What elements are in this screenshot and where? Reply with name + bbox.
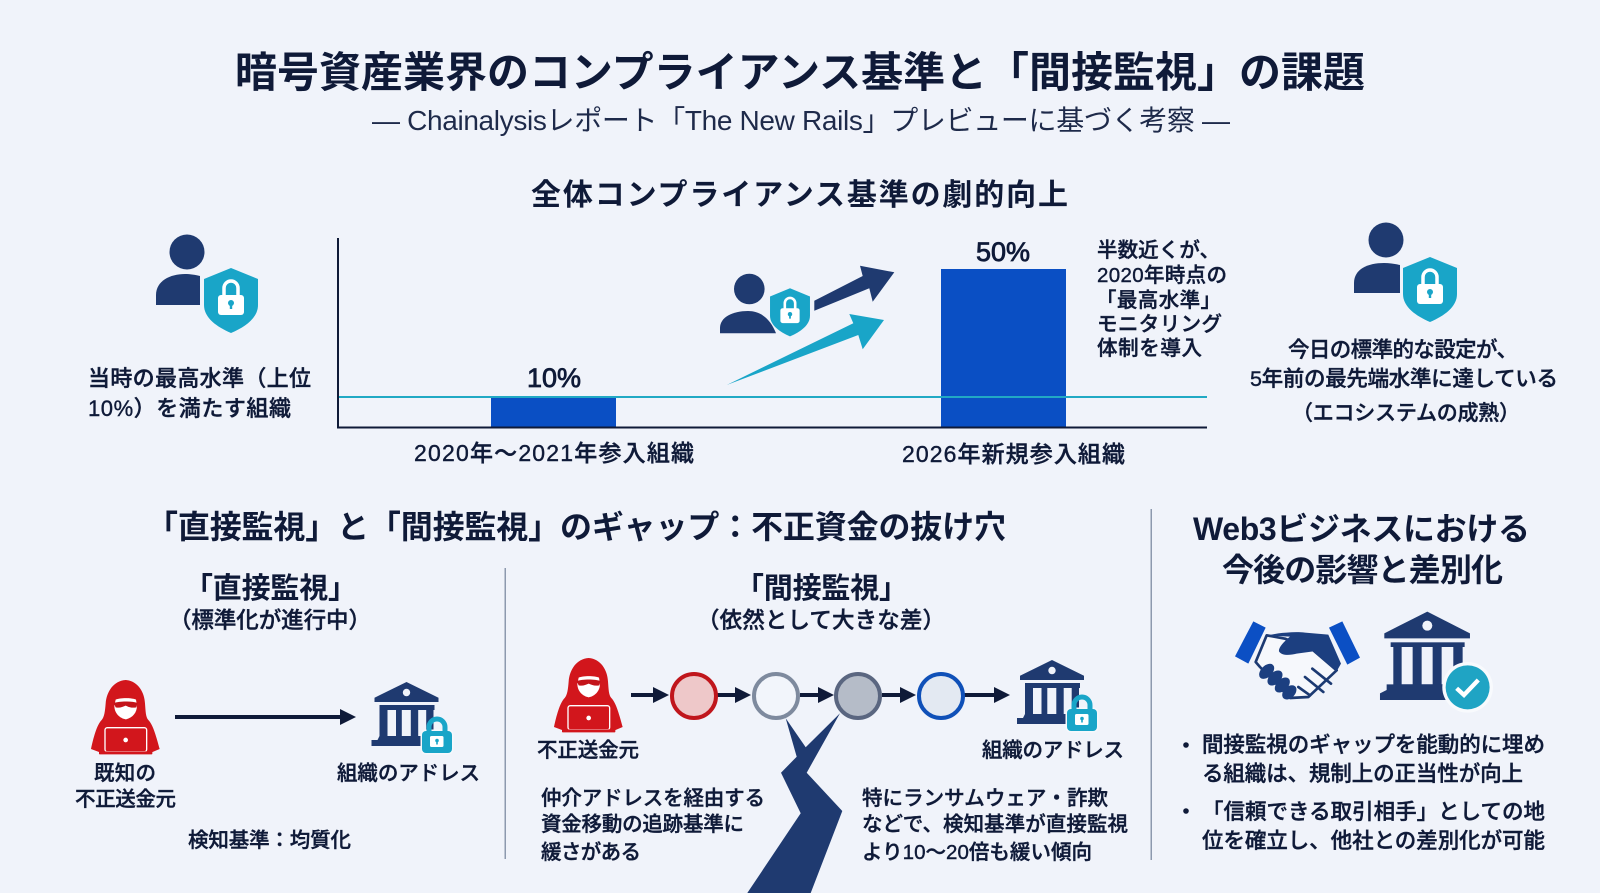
- heading: gap: 「直接監視」と「間接監視」のギャップ：不正資金の抜け穴: [146, 509, 1006, 545]
- subheading: standardizing: （標準化が進行中）: [169, 608, 371, 633]
- label: source: 不正送金元: [537, 739, 639, 762]
- bullet list: 位を確立し、他社との差別化が可能: [1202, 829, 1545, 853]
- bullet list: る組織は、規制上の正当性が向上: [1202, 762, 1523, 786]
- node: red: [672, 674, 716, 718]
- text: today's standard: （エコシステムの成熟）: [1292, 402, 1520, 425]
- divider: [1150, 509, 1152, 860]
- text: today's standard: 5年前の最先端水準に達している: [1250, 367, 1558, 391]
- annotation: nearly half: 半数近くが、: [1097, 239, 1220, 262]
- value: 10%: 10%: [527, 363, 581, 393]
- icon: bank with lock: [1017, 660, 1098, 732]
- subheading: big gap: （依然として大きな差）: [697, 607, 945, 633]
- icon: user with shield left: [156, 234, 258, 333]
- value: 50%: 50%: [976, 237, 1030, 267]
- text: intermediary addresses: 仲介アドレスを経由する: [541, 787, 765, 810]
- annotation: nearly half: [1096, 239, 1227, 360]
- text: top level at the time: [88, 366, 311, 421]
- icon: bank with lock: [372, 682, 454, 754]
- divider: [504, 568, 506, 859]
- label: known source: 不正送金元: [75, 788, 176, 811]
- arrow: direct: [175, 709, 356, 725]
- axes: [338, 238, 1207, 428]
- icon: crack: [747, 713, 842, 893]
- subtitle: ― Chainalysisレポート「The New Rails」プレビューに基づく考察 ―: [372, 105, 1230, 136]
- label: organization address: 組織のアドレス: [337, 762, 480, 785]
- axis label 2026: 2026年新規参入組織: [902, 441, 1125, 467]
- bar: 2020-2021: [491, 397, 616, 427]
- text: ransomware: 特にランサムウェア・詐欺: [862, 787, 1108, 810]
- text: top level at the time: 当時の最高水準（上位: [88, 366, 311, 391]
- heading: web3: 今後の影響と差別化: [1222, 552, 1503, 588]
- label: known source: 既知の: [94, 762, 156, 785]
- panel: indirect monitoring: [537, 572, 1128, 893]
- text: ransomware: などで、検知基準が直接監視: [862, 813, 1128, 836]
- annotation: nearly half: 2020年時点の: [1097, 264, 1227, 287]
- icon: hacker: [554, 658, 623, 732]
- icon: handshake: [1235, 621, 1360, 702]
- axis label 2020-2021: 2020年〜2021年参入組織: [414, 440, 694, 466]
- icon: bank with check: [1380, 612, 1493, 713]
- threshold line: [338, 396, 1207, 398]
- bar: 2026: [941, 269, 1066, 427]
- label: organization address: 組織のアドレス: [982, 739, 1124, 762]
- icon: small user with shield and arrows: [720, 266, 894, 385]
- title: 暗号資産業界のコンプライアンス基準と「間接監視」の課題: [235, 49, 1365, 96]
- annotation: nearly half: 「最高水準」: [1096, 289, 1221, 312]
- text: intermediary addresses: 資金移動の追跡基準に: [541, 813, 744, 836]
- text: ransomware: [862, 787, 1128, 864]
- node: grey: [836, 674, 880, 718]
- heading: web3: Web3ビジネスにおける: [1193, 511, 1530, 547]
- text: today's standard: [1250, 338, 1558, 425]
- bullet list: [1183, 733, 1545, 853]
- text: intermediary addresses: [541, 787, 765, 864]
- icon: hacker: [91, 680, 160, 754]
- text: ransomware: より10〜20倍も緩い傾向: [862, 841, 1092, 864]
- text: top level at the time: 10%）を満たす組織: [88, 396, 291, 421]
- panel: web3 business: [1183, 511, 1545, 853]
- bullet list: 間接監視のギャップを能動的に埋め: [1202, 733, 1545, 757]
- panel: direct monitoring: [75, 572, 480, 852]
- text: detection standard: 検知基準：均質化: [188, 829, 351, 852]
- heading: direct monitoring: 「直接監視」: [184, 572, 357, 605]
- annotation: nearly half: モニタリング: [1097, 313, 1222, 336]
- text: intermediary addresses: 緩さがある: [541, 841, 641, 864]
- heading: compliance standard: 全体コンプライアンス基準の劇的向上: [531, 179, 1068, 212]
- icon: user with shield right: [1354, 222, 1457, 322]
- node: white: [754, 674, 798, 718]
- heading: indirect monitoring: 「間接監視」: [735, 572, 908, 605]
- annotation: nearly half: 体制を導入: [1097, 337, 1202, 360]
- bar chart: [338, 237, 1207, 467]
- node: blue: [919, 674, 963, 718]
- label: known source: [75, 762, 176, 811]
- text: today's standard: 今日の標準的な設定が、: [1288, 338, 1518, 362]
- heading: web3: [1193, 511, 1530, 588]
- flow arrows: [631, 687, 1010, 703]
- panel: compliance standard improvement: [88, 179, 1558, 467]
- bullet list: 「信頼できる取引相手」としての地: [1202, 800, 1545, 824]
